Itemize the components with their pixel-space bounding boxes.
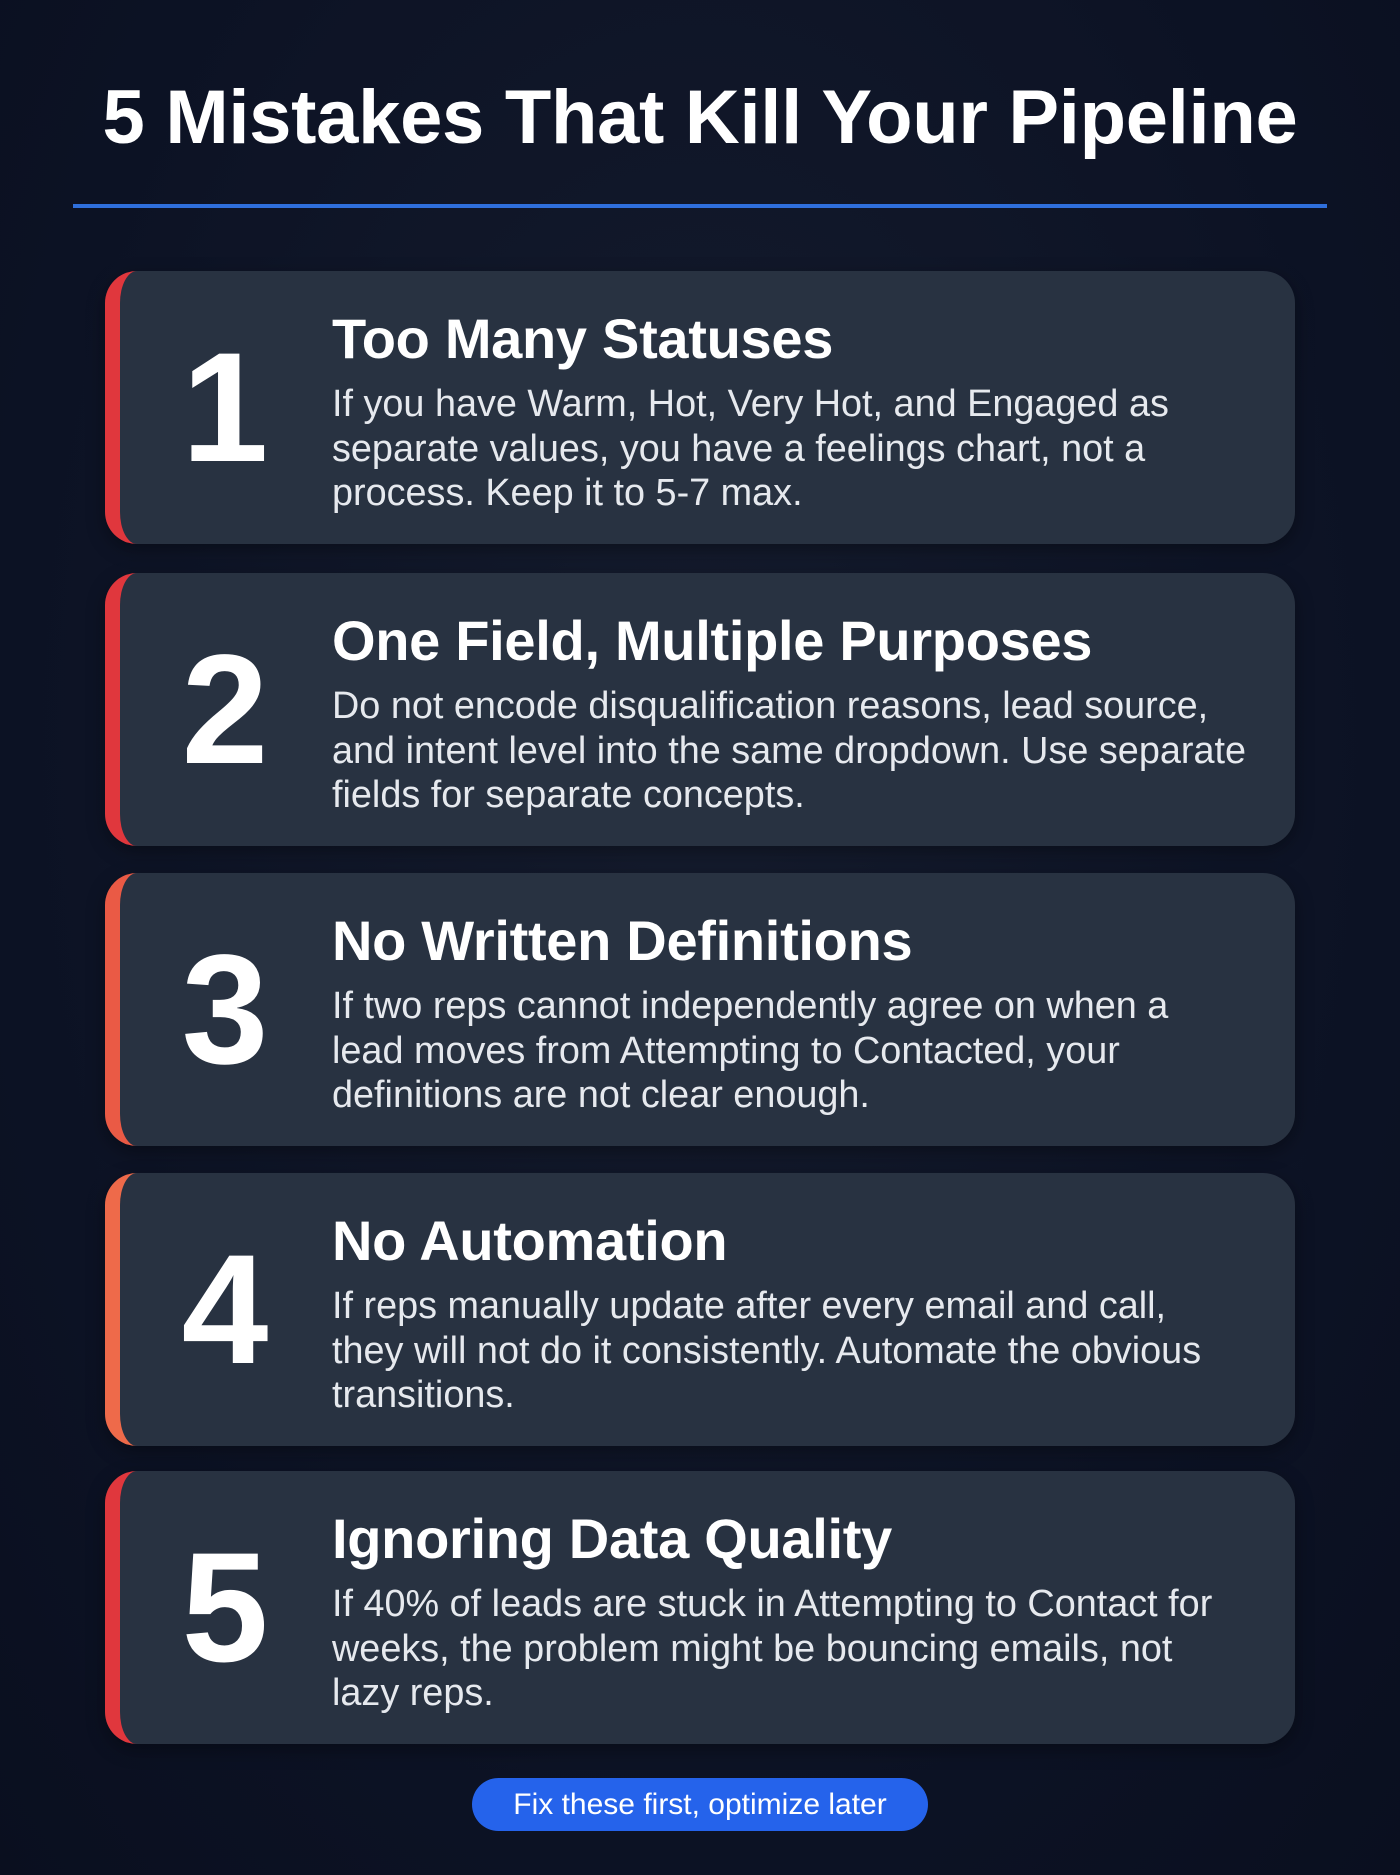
number 5: 5 (182, 1520, 268, 1694)
number 3: 3 (182, 922, 268, 1096)
heading 3: No Written Definitions (332, 909, 912, 972)
text 5 (332, 1583, 1212, 1714)
text 2: fields for separate concepts. (332, 774, 805, 816)
text 5: If 40% of leads are stuck in Attempting to Contact for (332, 1583, 1212, 1625)
panel: mistake 2 (105, 573, 1295, 846)
text 1: separate values, you have a feelings chart, not a (332, 428, 1145, 470)
text 3: lead moves from Attempting to Contacted, your (332, 1030, 1120, 1072)
title: 5 Mistakes That Kill Your Pipeline (103, 75, 1297, 160)
text 5: lazy reps. (332, 1672, 494, 1714)
text 4: transitions. (332, 1374, 515, 1416)
text 1: process. Keep it to 5-7 max. (332, 472, 803, 514)
text 3 (332, 985, 1168, 1116)
footer button (472, 1778, 928, 1831)
heading 4: No Automation (332, 1209, 727, 1272)
heading 2: One Field, Multiple Purposes (332, 609, 1092, 672)
panel: mistake 4 (105, 1173, 1295, 1446)
number 2: 2 (182, 622, 268, 796)
number 4: 4 (182, 1222, 268, 1396)
text 2 (332, 685, 1246, 816)
text 5: weeks, the problem might be bouncing emails, not (332, 1628, 1172, 1670)
panel: mistake 5 (105, 1471, 1295, 1744)
text 1 (332, 383, 1169, 514)
footer button: Fix these first, optimize later (513, 1788, 887, 1821)
text 4: they will not do it consistently. Automate the obvious (332, 1330, 1201, 1372)
text 4: If reps manually update after every email and call, (332, 1285, 1166, 1327)
text 3: If two reps cannot independently agree on when a (332, 985, 1168, 1027)
panel: mistake 1 (105, 271, 1295, 544)
heading 5: Ignoring Data Quality (332, 1507, 892, 1570)
text 4 (332, 1285, 1201, 1416)
number 1: 1 (182, 320, 268, 494)
text 1: If you have Warm, Hot, Very Hot, and Engaged as (332, 383, 1169, 425)
panel: mistake 3 (105, 873, 1295, 1146)
text 3: definitions are not clear enough. (332, 1074, 870, 1116)
text 2: and intent level into the same dropdown. Use separate (332, 730, 1246, 772)
heading 1: Too Many Statuses (332, 307, 833, 370)
text 2: Do not encode disqualification reasons, lead source, (332, 685, 1208, 727)
